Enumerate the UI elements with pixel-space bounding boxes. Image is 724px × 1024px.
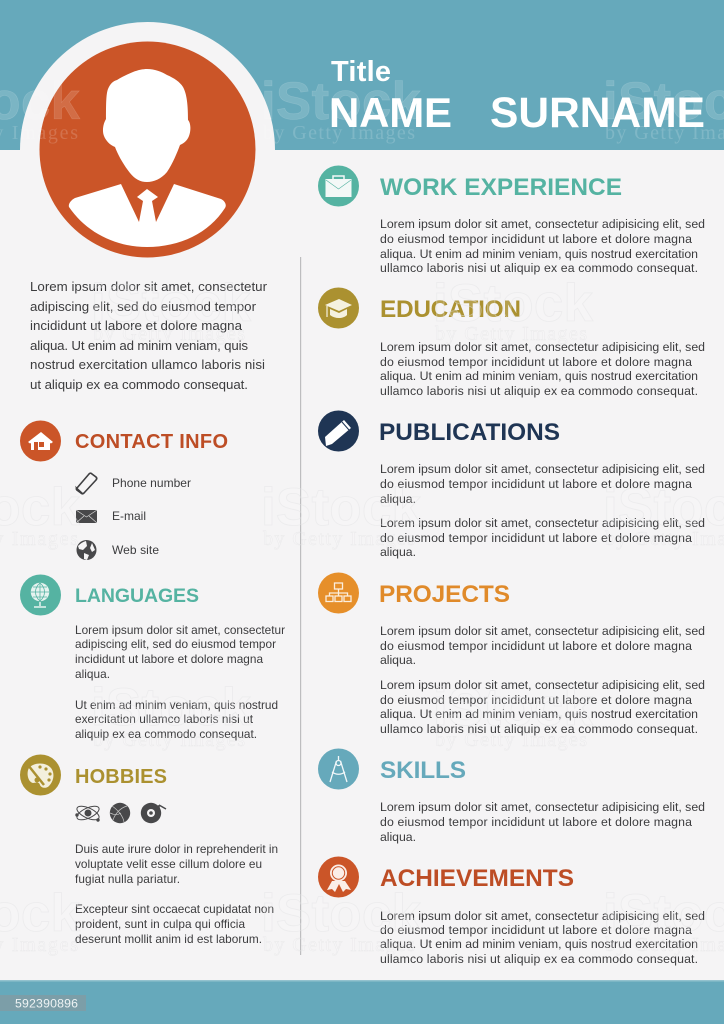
- text block: projects: aliqua. Ut enim ad minim veniam, quis nostrud exercitation: [380, 707, 698, 721]
- heading: publications: PUBLICATIONS: [379, 419, 560, 446]
- surname: SURNAME: [490, 90, 705, 137]
- text block: hobbies: Duis aute irure dolor in reprehenderit in: [75, 842, 278, 856]
- stock watermark overlay: iStock: [433, 678, 594, 737]
- text block: profile intro: adipiscing elit, sed do eiusmod tempor: [30, 299, 257, 314]
- text block: publications: aliqua.: [380, 492, 416, 506]
- heading: work experience: WORK EXPERIENCE: [380, 174, 622, 201]
- text block: education: ullamco laboris nisi ut aliquip ex ea commodo consequat.: [380, 384, 698, 398]
- stock watermark overlay: iStock: [91, 274, 252, 333]
- stock watermark overlay: by Getty Images: [263, 122, 415, 144]
- text block: publications: do eiusmod tempor incididunt ut labore et dolore magna: [380, 477, 692, 491]
- text block: languages: exercitation ullamco laboris nisi ut: [75, 712, 254, 726]
- panel: hobbies: [20, 754, 278, 946]
- text block: hobbies: voluptate velit esse cillum dolore eu: [75, 857, 262, 871]
- panel: languages: [20, 574, 285, 741]
- text block: publications: Lorem ipsum dolor sit amet, consectetur adipisicing elit, sed: [380, 462, 705, 476]
- icon: graduation cap: [318, 288, 359, 328]
- stock watermark overlay: iStock: [261, 72, 422, 131]
- text block: languages: Lorem ipsum dolor sit amet, consectetur: [75, 623, 285, 637]
- icon: phone: [76, 473, 97, 494]
- text block: work experience: [380, 217, 705, 275]
- text block: hobbies: [75, 842, 278, 946]
- text block: languages: incididunt ut labore et dolore magna: [75, 652, 263, 666]
- text block: skills: [380, 800, 705, 844]
- icon: portrait avatar: [40, 42, 256, 258]
- website label: Web site: [112, 543, 159, 557]
- portrait arch: [20, 22, 275, 150]
- panel: achievements: [318, 856, 705, 966]
- text block: publications: Lorem ipsum dolor sit amet, consectetur adipisicing elit, sed: [380, 516, 705, 530]
- text block: publications: aliqua.: [380, 545, 416, 559]
- icon: pencil: [318, 410, 359, 452]
- panel: projects: [318, 572, 705, 736]
- text block: education: Lorem ipsum dolor sit amet, consectetur adipisicing elit, sed: [380, 340, 705, 354]
- icon: palette: [20, 754, 61, 796]
- text block: skills: aliqua.: [380, 830, 416, 844]
- heading: projects: PROJECTS: [379, 581, 510, 608]
- text block: publications: do eiusmod tempor incididunt ut labore et dolore magna: [380, 531, 692, 545]
- title: Title: [331, 56, 391, 88]
- icon: compass: [318, 748, 359, 790]
- icon: globe: [76, 540, 96, 560]
- text block: work experience: aliqua. Ut enim ad minim veniam, quis nostrud exercitation: [380, 247, 698, 261]
- name: NAME: [329, 89, 452, 136]
- stock watermark overlay: iStock: [433, 274, 594, 333]
- text block: education: aliqua. Ut enim ad minim veniam, quis nostrud exercitation: [380, 369, 698, 383]
- text block: profile intro: [30, 279, 268, 392]
- heading: skills: SKILLS: [380, 757, 466, 784]
- stock watermark overlay: by Getty Images: [263, 528, 415, 550]
- text block: languages: adipiscing elit, sed do eiusmod tempor: [75, 637, 276, 651]
- text block: profile intro: incididunt ut labore et dolore magna: [30, 318, 243, 333]
- panel: publications: [318, 410, 705, 559]
- phone label: Phone number: [112, 476, 191, 490]
- text block: projects: aliqua.: [380, 653, 416, 667]
- text block: projects: [380, 624, 705, 736]
- text block: languages: aliqua.: [75, 667, 110, 681]
- icon: atom: [75, 803, 101, 823]
- text block: skills: Lorem ipsum dolor sit amet, consectetur adipisicing elit, sed: [380, 800, 705, 814]
- text block: education: [380, 340, 705, 398]
- image id label: [0, 995, 86, 1011]
- text block: languages: [75, 623, 285, 741]
- text block: hobbies: Excepteur sint occaecat cupidatat non: [75, 902, 274, 916]
- icon: envelope: [76, 510, 97, 523]
- icon: basketball: [110, 803, 130, 823]
- stock watermark overlay: by Getty Images: [93, 323, 245, 345]
- heading: education: EDUCATION: [380, 296, 521, 323]
- panel: contact info: [20, 420, 228, 560]
- text block: skills: do eiusmod tempor incididunt ut labore et dolore magna: [380, 815, 692, 829]
- email label: E-mail: [112, 509, 146, 523]
- icon: house: [20, 420, 61, 462]
- text block: work experience: do eiusmod tempor incididunt ut labore et dolore magna: [380, 232, 692, 246]
- text block: languages: aliquip ex ea commodo consequat.: [75, 727, 257, 741]
- text block: projects: Lorem ipsum dolor sit amet, consectetur adipisicing elit, sed: [380, 678, 705, 692]
- text block: profile intro: aliqua. Ut enim ad minim veniam, quis: [30, 338, 248, 353]
- icon: vinyl record: [141, 803, 166, 823]
- text block: achievements: [380, 909, 705, 966]
- text block: achievements: ullamco laboris nisi ut aliquip ex ea commodo consequat.: [380, 952, 698, 966]
- text block: projects: ullamco laboris nisi ut aliquip ex ea commodo consequat.: [380, 722, 698, 736]
- panel: education: [318, 288, 705, 398]
- text block: projects: do eiusmod tempor incididunt ut labore et dolore magna: [380, 693, 692, 707]
- panel: work experience: [318, 166, 705, 275]
- text block: achievements: Lorem ipsum dolor sit amet, consectetur adipisicing elit, sed: [380, 909, 705, 923]
- text block: languages: Ut enim ad minim veniam, quis nostrud: [75, 698, 278, 712]
- text block: hobbies: proident, sunt in culpa qui officia: [75, 917, 245, 931]
- text block: work experience: ullamco laboris nisi ut aliquip ex ea commodo consequat.: [380, 261, 698, 275]
- stock watermark overlay: by Getty Images: [435, 323, 587, 345]
- text block: achievements: aliqua. Ut enim ad minim veniam, quis nostrud exercitation: [380, 937, 698, 951]
- stock watermark overlay: by Getty Images: [93, 729, 245, 751]
- text block: hobbies: fugiat nulla pariatur.: [75, 872, 180, 886]
- icon: desk globe: [20, 574, 61, 616]
- text block: education: do eiusmod tempor incididunt ut labore et dolore magna: [380, 355, 692, 369]
- text block: profile intro: nostrud exercitation ullamco laboris nisi: [30, 357, 265, 372]
- stock watermark overlay: iStock: [261, 478, 422, 537]
- image id label: 592390896: [15, 996, 78, 1010]
- heading: achievements: ACHIEVEMENTS: [380, 865, 574, 892]
- text block: hobbies: deserunt mollit anim id est laborum.: [75, 932, 262, 946]
- text block: publications: [380, 462, 705, 559]
- footer band: [0, 980, 724, 1024]
- text block: projects: Lorem ipsum dolor sit amet, consectetur adipisicing elit, sed: [380, 624, 705, 638]
- stock watermark overlay: by Getty Images: [435, 729, 587, 751]
- heading: contact info: CONTACT INFO: [75, 431, 228, 453]
- stock watermark overlay: by Getty Images: [263, 934, 415, 956]
- stock watermark overlay: iStock: [261, 884, 422, 943]
- icon: award rosette: [318, 856, 359, 898]
- text block: profile intro: ut aliquip ex ea commodo consequat.: [30, 377, 248, 392]
- header band: [0, 0, 724, 150]
- icon: briefcase: [318, 166, 359, 206]
- icon: hierarchy: [318, 572, 359, 614]
- panel: skills: [318, 748, 705, 844]
- text block: profile intro: Lorem ipsum dolor sit amet, consectetur: [30, 279, 268, 294]
- heading: hobbies: HOBBIES: [75, 766, 167, 788]
- text block: projects: do eiusmod tempor incididunt ut labore et dolore magna: [380, 639, 692, 653]
- text block: work experience: Lorem ipsum dolor sit amet, consectetur adipisicing elit, sed: [380, 217, 705, 231]
- heading: languages: LANGUAGES: [75, 585, 199, 607]
- stock watermark overlay: iStock: [91, 678, 252, 737]
- column divider: [300, 257, 301, 955]
- text block: achievements: do eiusmod tempor incididunt ut labore et dolore magna: [380, 923, 692, 937]
